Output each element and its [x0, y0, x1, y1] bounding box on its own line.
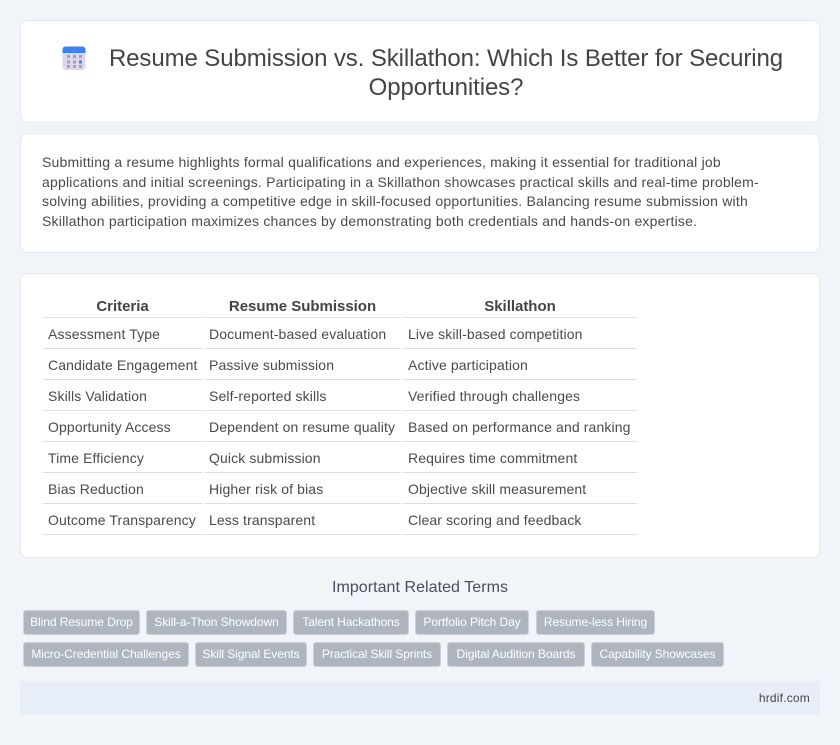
row: bias reduction: Higher risk of bias [209, 481, 323, 497]
row: candidate engagement: Candidate Engagement [48, 357, 198, 373]
footer source: hrdif.com [759, 691, 810, 705]
row: opportunity access: Opportunity Access [48, 419, 171, 435]
row: bias reduction: Bias Reduction [48, 481, 144, 497]
row: skills validation: Self-reported skills [209, 388, 327, 404]
tag: Talent Hackathons [302, 615, 400, 629]
related terms heading: Important Related Terms [332, 579, 508, 596]
tag [447, 642, 585, 667]
comparison table panel [20, 273, 820, 558]
row: time efficiency: Time Efficiency [48, 450, 144, 466]
tag: Digital Audition Boards [457, 647, 575, 661]
row: skills validation: Skills Validation [48, 388, 147, 404]
row: assessment type [48, 326, 583, 342]
tag [415, 610, 529, 635]
row: assessment type: Live skill-based competition [408, 326, 583, 342]
row: assessment type: Document-based evaluation [209, 326, 386, 342]
title: Resume Submission vs. Skillathon: Which Is Better for Securing Opportunities? [109, 45, 783, 101]
tag: Practical Skill Sprints [322, 647, 432, 661]
intro paragraph [42, 154, 759, 229]
intro paragraph: solving abilities, providing a competitive edge in skill-focused opportunities. Balancing resume submission with [42, 193, 748, 209]
footer bar [20, 681, 820, 715]
tag: Capability Showcases [600, 647, 715, 661]
intro paragraph: Submitting a resume highlights formal qualifications and experiences, making it essential for traditional job [42, 154, 721, 170]
related terms tags [23, 610, 724, 667]
header panel [20, 20, 820, 123]
row: opportunity access: Dependent on resume quality [209, 419, 395, 435]
row: bias reduction: Objective skill measurement [408, 481, 586, 497]
tag [293, 610, 409, 635]
row: bias reduction [48, 481, 586, 497]
intro paragraph: applications and initial screenings. Participating in a Skillathon showcases practical skills and real-time problem- [42, 174, 759, 190]
tag [23, 610, 140, 635]
row: time efficiency [48, 450, 578, 466]
row: candidate engagement: Active participation [408, 357, 528, 373]
tag: Skill-a-Thon Showdown [154, 615, 279, 629]
row: candidate engagement: Passive submission [209, 357, 334, 373]
tag [536, 610, 655, 635]
icon: calendar [62, 46, 86, 70]
tag [146, 610, 287, 635]
row: skills validation: Verified through challenges [408, 388, 580, 404]
row: time efficiency: Quick submission [209, 450, 321, 466]
tag: Blind Resume Drop [30, 615, 133, 629]
tag [23, 642, 189, 667]
row: outcome transparency: Outcome Transparency [48, 512, 196, 528]
row: outcome transparency: Less transparent [209, 512, 315, 528]
row: outcome transparency [48, 512, 582, 528]
comparison table [43, 298, 637, 535]
tag: Skill Signal Events [202, 647, 300, 661]
row: skills validation [48, 388, 580, 404]
row: assessment type: Assessment Type [48, 326, 160, 342]
tag: Portfolio Pitch Day [423, 615, 521, 629]
column headers: Criteria [96, 298, 149, 315]
tag [591, 642, 724, 667]
intro paragraph: Skillathon participation maximizes chances by demonstrating both credentials and hands-on expertise. [42, 213, 697, 229]
tag [313, 642, 441, 667]
column headers: Resume Submission [229, 298, 376, 315]
tag [195, 642, 307, 667]
row: opportunity access: Based on performance and ranking [408, 419, 631, 435]
tag: Micro-Credential Challenges [31, 647, 181, 661]
row: opportunity access [48, 419, 631, 435]
row: outcome transparency: Clear scoring and feedback [408, 512, 582, 528]
tag: Resume-less Hiring [544, 615, 647, 629]
column headers [96, 298, 556, 315]
intro text panel [20, 133, 820, 253]
column headers: Skillathon [484, 298, 556, 315]
row: candidate engagement [48, 357, 528, 373]
row: time efficiency: Requires time commitment [408, 450, 577, 466]
